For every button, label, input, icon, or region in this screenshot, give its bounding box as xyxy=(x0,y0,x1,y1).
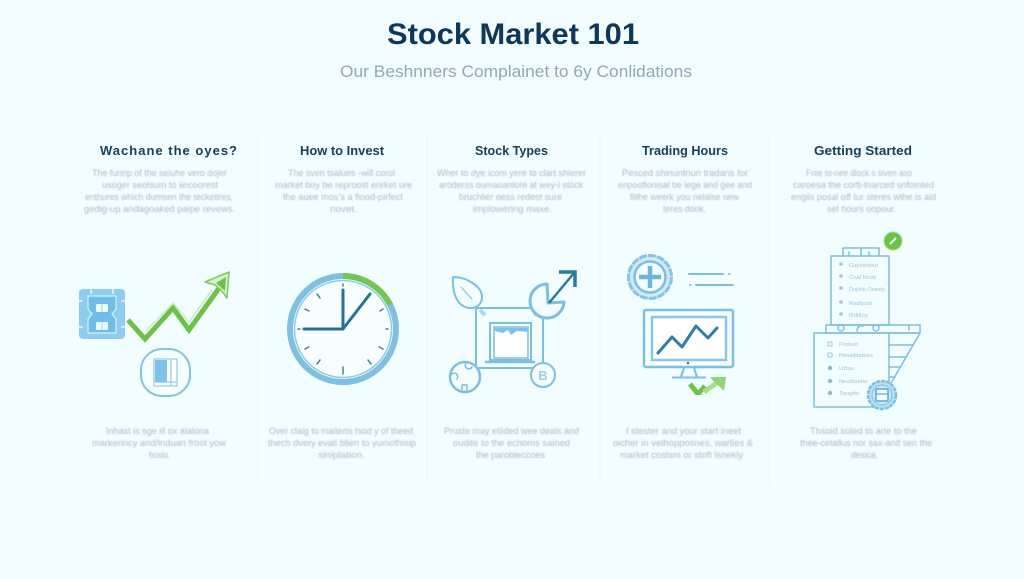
note text: oudite to the echoms sained xyxy=(453,438,570,449)
upper checklist: Dujstlo Oiandy xyxy=(849,287,886,293)
description text xyxy=(437,168,586,215)
note text xyxy=(613,426,754,461)
note text: market costsm or stoft lsnekly xyxy=(620,450,743,461)
description text: Free to-nee dlock s siven aso xyxy=(806,168,912,179)
rising arrow xyxy=(549,272,575,303)
title: Stock Market 101 xyxy=(387,18,639,51)
globe xyxy=(450,362,480,392)
icon: monitor with line chart xyxy=(644,310,733,378)
description text xyxy=(618,168,752,215)
heading: How to Invest xyxy=(300,143,385,158)
lower checklist xyxy=(814,333,889,407)
description text: Wher to dye icom yere to clart shierer xyxy=(437,168,586,179)
note text: boslo. xyxy=(149,450,170,461)
lower checklist: Urtas xyxy=(839,366,855,372)
note text: markerincy and/induan froot yow xyxy=(92,438,226,449)
line chart xyxy=(658,326,717,353)
description text: aroderss oumaoanlore at wey-i stock xyxy=(439,180,583,191)
frame xyxy=(476,308,543,368)
green progress arc xyxy=(343,276,390,304)
description text: enthures which dumsen the tecketires, xyxy=(85,192,233,203)
heading: Trading Hours xyxy=(642,143,728,158)
note text: siniplation. xyxy=(318,450,365,461)
description text xyxy=(275,168,412,215)
upper checklist xyxy=(831,248,889,325)
description text: enpoofionisal be lege and gee and xyxy=(618,180,752,191)
icon: chip, growth arrow and book xyxy=(79,272,229,396)
icon: text lines xyxy=(689,274,733,285)
coin: B xyxy=(538,368,548,383)
description text xyxy=(84,168,235,215)
lower checklist: Pesaititadurs xyxy=(839,353,874,359)
upper checklist: Cupstiniout xyxy=(849,263,879,269)
note text: Over claig to maiterts tsod y of theed xyxy=(269,426,413,437)
description text: Pesced shinuntnun tradans for xyxy=(622,168,748,179)
note text xyxy=(268,426,416,461)
ruled stair sheet xyxy=(889,333,920,385)
note text: thech dvery evali blien to yumothisip xyxy=(268,438,416,449)
growth arrow xyxy=(128,272,229,339)
icon: gear with plus xyxy=(628,256,672,298)
icon: checklists xyxy=(814,232,920,409)
description text: engils posal off tur steres wthe is aid xyxy=(791,192,936,203)
description text: gedig-up andagoaked paipe revews. xyxy=(84,204,235,215)
note text xyxy=(800,426,932,461)
binding band xyxy=(826,325,920,333)
icon: stock types diagram xyxy=(450,272,575,392)
description text: the auee mos's a flood-pirfect xyxy=(283,192,403,203)
subtitle: Our Beshnners Complainet to 6y Conlidations xyxy=(340,62,692,81)
note text: Pruste may etiided wee deals and xyxy=(444,426,579,437)
lower checklist: Tangits xyxy=(839,391,860,397)
panel: how to invest xyxy=(268,143,416,461)
description text xyxy=(791,168,936,215)
description text: market boy be reproost enrket ure xyxy=(275,180,412,191)
description text: teres dook. xyxy=(663,204,706,215)
pie xyxy=(530,284,564,318)
lower checklist: Neudoums xyxy=(839,379,868,385)
chip xyxy=(79,289,125,339)
note text: thee-cetallus nor sax-and sen the xyxy=(800,438,932,449)
note text xyxy=(444,426,579,461)
description text: The funrip of the seiuhe vero dojer xyxy=(92,168,227,179)
check badge xyxy=(884,232,902,250)
description text: bruchlier oess redest sure xyxy=(459,192,562,203)
lower checklist: Porkud xyxy=(839,342,858,348)
description text: novet. xyxy=(330,204,357,215)
leaf xyxy=(453,277,482,308)
description text: implowering maxe. xyxy=(473,204,552,215)
heading: Stock Types xyxy=(475,143,548,158)
panel: what are stocks xyxy=(79,143,237,461)
book badge xyxy=(141,349,190,396)
note text: Inhast is sge iil ox alalona xyxy=(106,426,210,437)
description text: set hours oopour. xyxy=(827,204,896,215)
note text: I stester and your start ineet xyxy=(626,426,741,437)
description text: The sven tsalues -will corol xyxy=(288,168,395,179)
icon: clock xyxy=(290,276,396,382)
upper checklist: Cwd Ifoott xyxy=(849,275,877,281)
panel: getting started xyxy=(791,143,936,461)
description text: fiilhe weerk you nelalse new xyxy=(630,192,739,203)
description text: usoger seolsum to iincoorest xyxy=(102,180,218,191)
heading: Getting Started xyxy=(814,143,912,158)
clock ticks xyxy=(298,284,388,374)
heading: Wachane the oyes? xyxy=(100,143,237,158)
description text: caroesa the corti-lnarced snfointed xyxy=(793,180,934,191)
panel: stock types xyxy=(437,143,586,461)
note text: Thsoid soled to arle to the xyxy=(810,426,917,437)
note text: the parobleccoes xyxy=(476,450,545,461)
panel: trading hours xyxy=(613,143,754,461)
note text: oicher in velhopposnes, warlies & xyxy=(613,438,754,449)
note text xyxy=(92,426,226,461)
clock hands xyxy=(304,290,370,329)
icon: green check and arrow xyxy=(690,377,726,394)
seal xyxy=(868,381,896,409)
note text: desica. xyxy=(851,450,878,461)
upper checklist: Rdtlloy xyxy=(849,313,869,319)
upper checklist: Radtjunt xyxy=(849,301,873,307)
